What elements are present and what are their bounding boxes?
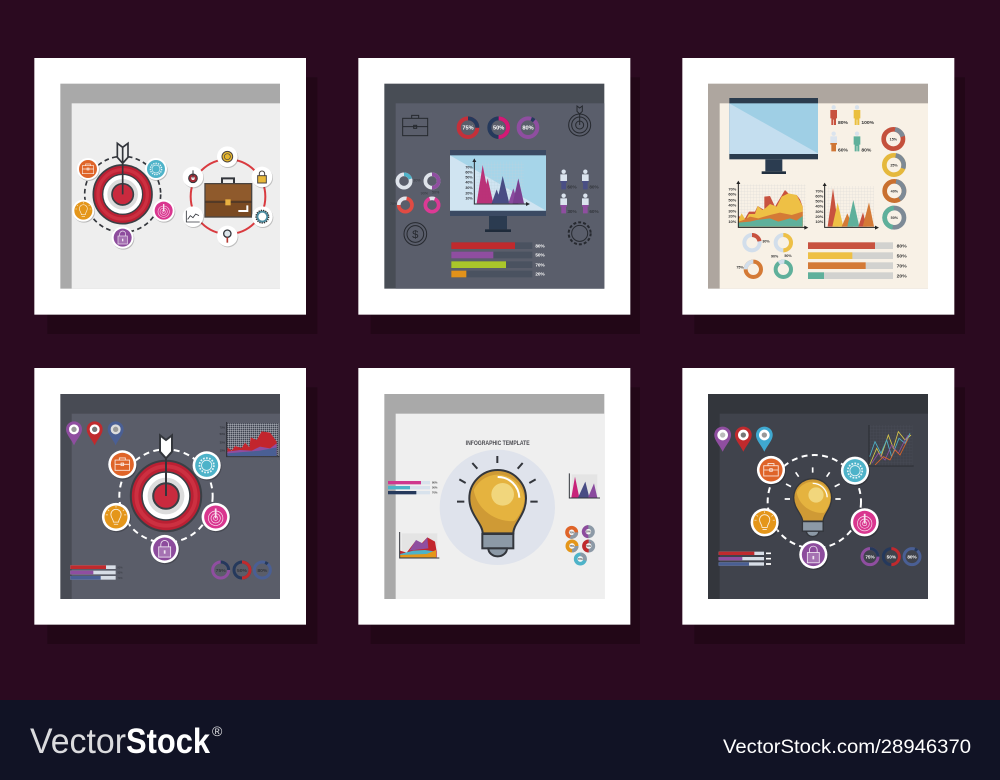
peaks chart — [815, 183, 879, 230]
peaks chart: 40% — [815, 204, 824, 209]
small donut labels — [736, 240, 792, 270]
dashed ring — [85, 156, 161, 232]
donut 75%: 75% — [865, 554, 876, 559]
donut 75% — [213, 562, 229, 578]
person 80% teal: 80% — [861, 147, 872, 153]
map pins — [66, 421, 124, 445]
area peaks chart: 40% — [465, 181, 473, 185]
logo wordmark: VectorStock — [30, 722, 221, 761]
bar chart — [808, 242, 907, 279]
person 100% yellow — [854, 105, 875, 126]
peaks chart: 20% — [815, 214, 824, 219]
bar chart — [451, 242, 546, 277]
area peaks chart: 50% — [465, 175, 473, 179]
donut 50%: 50% — [237, 568, 248, 574]
small donut labels: 20% — [413, 178, 421, 182]
donut 50% — [489, 118, 508, 137]
halo circle — [440, 450, 555, 565]
dashed ring — [768, 455, 861, 548]
icon: dollar coin outline — [404, 223, 427, 245]
person 60% orange: 60% — [838, 147, 849, 153]
icon: gear badge — [193, 451, 222, 481]
donut cluster — [567, 527, 593, 564]
area chart: 70% — [728, 187, 737, 192]
donut cluster labels: 50% — [586, 546, 592, 548]
bar chart — [388, 481, 438, 495]
panel: dark dashboard with monitor — [358, 58, 640, 334]
person 30% — [560, 193, 578, 214]
donut 50% — [234, 562, 250, 578]
arrow — [117, 143, 128, 194]
light bulb — [469, 470, 526, 556]
person 60%: 60% — [567, 184, 578, 189]
area chart — [400, 532, 439, 558]
small donut labels: 30% — [762, 240, 770, 244]
peaks chart: 70% — [815, 188, 824, 193]
donut column — [882, 128, 906, 229]
icon: lock badge — [151, 535, 180, 564]
icon: target badge — [851, 508, 880, 538]
donut cluster labels: 70% — [569, 532, 575, 534]
panel: target and briefcase on light wall — [34, 58, 317, 334]
icon: gear badge — [841, 457, 870, 486]
icon: dollar coin outline: $ — [412, 229, 419, 241]
person 30%: 30% — [567, 209, 578, 214]
area chart: 50% — [728, 197, 737, 202]
icon: target badge — [202, 503, 231, 532]
donut 80%: 80% — [522, 126, 534, 132]
donut 75%: 75% — [462, 126, 474, 132]
icon: bulb badge — [102, 503, 131, 532]
donut 80%: 80% — [907, 554, 918, 559]
donut column labels: 40% — [891, 189, 899, 193]
panel: target on dark wall — [34, 368, 317, 644]
target — [93, 165, 152, 224]
icon: lock badge — [112, 227, 134, 250]
small donut labels: 50% — [432, 191, 440, 195]
light bulb — [794, 479, 832, 537]
area chart: 10% — [728, 219, 737, 224]
area peaks chart — [465, 158, 530, 206]
person 60% purple — [582, 193, 600, 214]
small donut labels: 50% — [784, 254, 792, 258]
bar chart: 50% — [432, 486, 438, 490]
small donut labels: 90% — [771, 255, 779, 259]
peaks chart: 10% — [815, 219, 824, 224]
small donut labels: 70% — [390, 202, 398, 206]
person 60% purple: 60% — [589, 209, 600, 214]
area chart — [728, 181, 808, 230]
red ring — [191, 159, 265, 234]
bar chart: 70% — [535, 262, 546, 267]
icon: briefcase badge — [108, 450, 137, 480]
icon: coin — [217, 146, 238, 168]
target — [131, 461, 201, 531]
area peaks chart: 30% — [465, 186, 473, 190]
icon: briefcase badge — [757, 456, 786, 485]
peaks chart: 30% — [815, 209, 824, 214]
area chart: 20% — [728, 214, 737, 219]
area peaks chart: 70% — [465, 166, 473, 170]
donut column labels: 25% — [890, 163, 898, 167]
bar chart: 20% — [897, 273, 907, 279]
area chart — [220, 422, 279, 457]
bar chart: 80% — [535, 243, 546, 248]
area chart: 70% — [220, 425, 226, 429]
bar chart — [719, 552, 771, 566]
bar chart: 20% — [535, 272, 546, 277]
bar chart — [70, 565, 123, 580]
person 80% red: 80% — [838, 120, 849, 126]
person 80% red — [830, 105, 849, 126]
title: INFOGRAPHIC TEMPLATE — [466, 441, 530, 447]
area chart: 10% — [220, 449, 226, 453]
donut cluster labels: 70% — [578, 559, 584, 561]
briefcase — [205, 178, 252, 217]
monitor — [450, 150, 546, 232]
donut 75% — [862, 549, 878, 565]
bar chart: 80% — [432, 481, 438, 485]
icon: gear badge — [145, 158, 168, 181]
donut 50%: 50% — [493, 126, 504, 132]
footer bar — [0, 700, 1000, 780]
area chart: 40% — [728, 203, 737, 208]
line chart — [869, 425, 914, 466]
arrow — [160, 435, 172, 496]
donut 75% — [459, 118, 477, 137]
bar chart: 50% — [897, 253, 907, 259]
icon: briefcase badge — [77, 158, 100, 181]
donut 75%: 75% — [216, 568, 226, 574]
bar chart: 50% — [535, 253, 546, 258]
donut 50%: 50% — [887, 554, 897, 559]
donut cluster labels: 50% — [586, 532, 592, 534]
bar chart: 70% — [432, 491, 438, 495]
bar chart: 70% — [897, 263, 907, 269]
small donut labels: 90% — [421, 192, 429, 196]
area peaks chart: 60% — [465, 170, 473, 174]
area chart: 50% — [220, 432, 226, 436]
person 60% — [560, 169, 578, 189]
donut 80% — [252, 560, 273, 580]
bar chart: 50% — [117, 571, 123, 575]
icon: gear — [252, 206, 273, 228]
panel: light bulb on light wall — [358, 368, 640, 644]
area chart: 30% — [220, 440, 226, 444]
donut cluster labels: 75% — [570, 546, 575, 548]
icon: magnifier — [217, 226, 238, 247]
person 80% — [582, 169, 600, 189]
small donuts — [744, 235, 794, 280]
donut 80% — [902, 546, 922, 567]
donut 50% — [883, 549, 899, 565]
map pins — [714, 427, 773, 452]
bar chart: 80% — [117, 565, 123, 569]
donut 80%: 80% — [257, 568, 268, 574]
image id: VectorStock.com/28946370 — [723, 737, 971, 758]
person 60% orange — [830, 131, 849, 153]
dashed ring — [119, 449, 213, 543]
small donuts — [397, 174, 441, 214]
icon: bulb badge — [751, 508, 780, 538]
donut 80% — [516, 116, 540, 140]
small donut labels — [390, 178, 440, 206]
icon: dartboard — [183, 167, 204, 188]
bar chart: 70% — [117, 576, 123, 580]
peaks chart: 60% — [815, 193, 824, 198]
area peaks chart: 10% — [465, 196, 473, 200]
icon: briefcase outline — [403, 115, 428, 136]
area chart: 60% — [728, 192, 737, 197]
area peaks chart: 20% — [465, 191, 473, 195]
person 80% teal — [854, 131, 872, 153]
icon: target badge — [153, 200, 175, 223]
icon: target outline — [569, 106, 591, 136]
icon: bulb badge — [72, 200, 95, 223]
donut column labels — [890, 137, 899, 220]
panel: cream dashboard with monitor — [682, 58, 965, 334]
logo wordmark: ® — [212, 723, 223, 739]
person 80%: 80% — [589, 184, 600, 189]
icon: gear outline — [569, 222, 591, 244]
donut column labels: 15% — [890, 137, 898, 141]
person 100% yellow: 100% — [861, 120, 875, 126]
peaks chart — [569, 473, 600, 498]
peaks chart: 50% — [815, 198, 824, 203]
monitor — [729, 98, 818, 174]
donut cluster labels — [569, 532, 592, 561]
icon: lock badge — [799, 541, 828, 570]
donut column labels: 50% — [891, 216, 899, 220]
area chart: 30% — [728, 208, 737, 213]
bar chart: 80% — [897, 243, 907, 249]
icon: padlock — [252, 167, 273, 188]
panel: light bulb on dark wall — [682, 368, 965, 644]
rays — [785, 467, 841, 499]
icon: line chart — [183, 206, 204, 228]
small donut labels: 75% — [736, 266, 744, 270]
rays — [457, 456, 538, 502]
